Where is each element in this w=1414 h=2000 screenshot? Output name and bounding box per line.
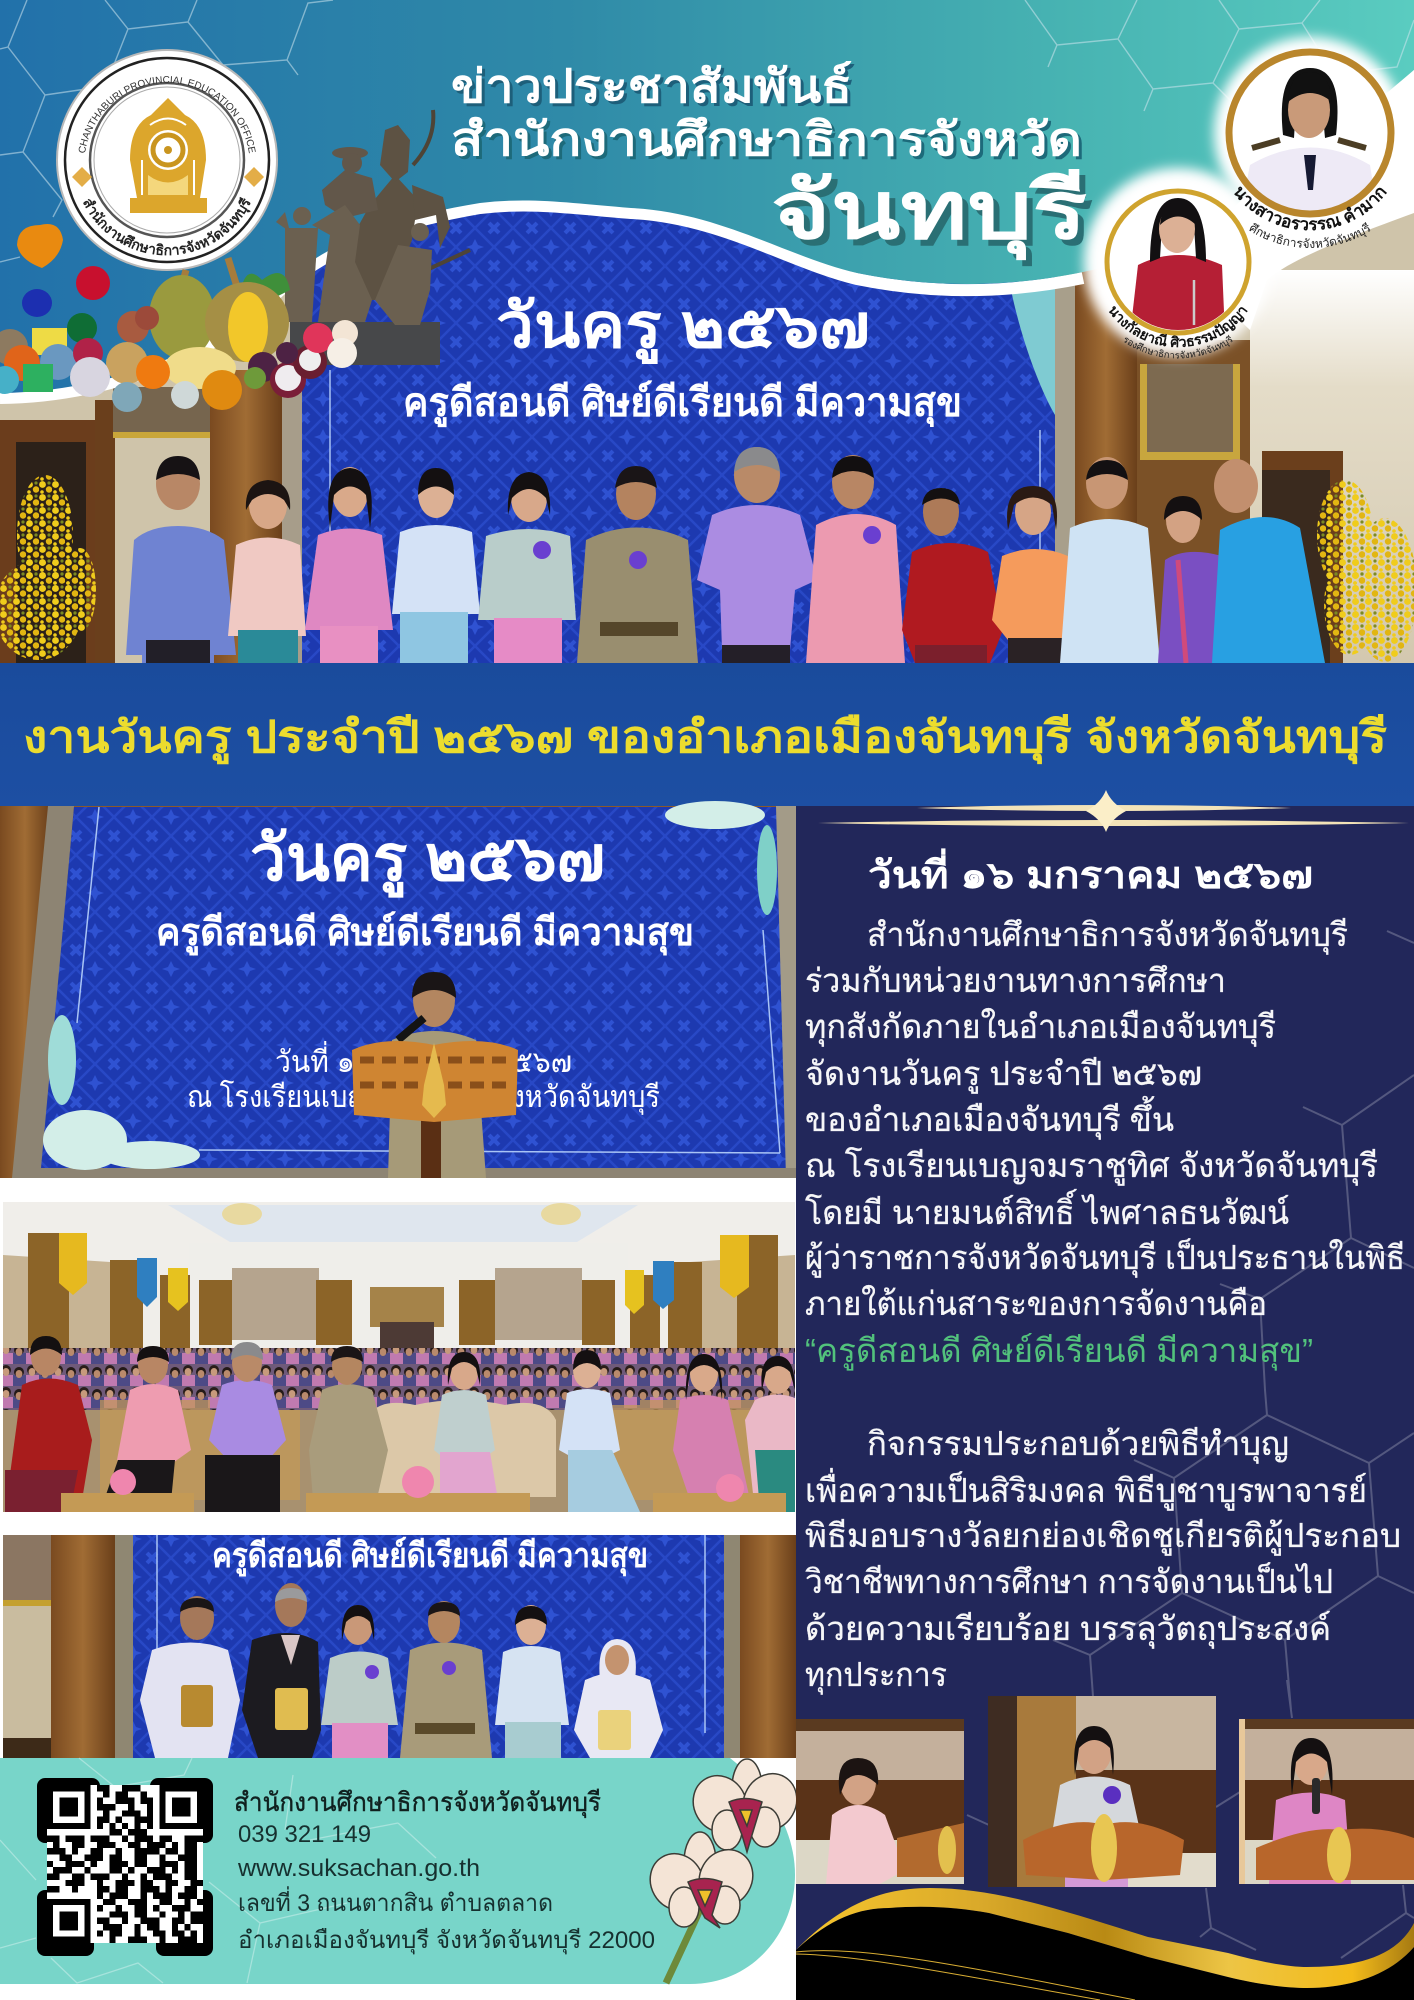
person 1	[126, 456, 236, 663]
paragraph 1: โดยมี นายมนต์สิทธิ์ ไพศาลธนวัฒน์	[805, 1189, 1289, 1231]
hero group photo	[0, 200, 1414, 663]
flowers right	[1317, 480, 1414, 662]
title 2: รองศึกษาธิการจังหวัดจันทบุรี	[1124, 334, 1232, 359]
header title line 1: ข่าวประชาสัมพันธ์	[451, 60, 852, 112]
person 8	[806, 455, 905, 663]
hero photo left door	[0, 420, 95, 663]
green theme quote: “ครูดีสอนดี ศิษย์ดีเรียนดี มีความสุข”	[805, 1332, 1313, 1371]
rider	[322, 147, 378, 218]
logo badge	[56, 49, 278, 271]
hexagon lines	[967, 931, 1414, 1958]
durians	[149, 258, 290, 389]
screen subtitle: ครูดีสอนดี ศิษย์ดีเรียนดี มีความสุข	[403, 380, 962, 428]
name 2: นางกัลยาณี ศิวธรรมปัญญา	[1109, 306, 1248, 348]
small photo: speaker center	[988, 1696, 1216, 1887]
screen subtitle: ครูดีสอนดี ศิษย์ดีเรียนดี มีความสุข	[156, 911, 694, 956]
photo: award recipients	[3, 1535, 796, 1758]
paragraph 2: พิธีมอบรางวัลยกย่องเชิดชูเกียรติผู้ประกอบ	[805, 1517, 1401, 1556]
person 11	[1060, 457, 1160, 663]
small photo: speaker right	[1239, 1719, 1414, 1884]
paragraph 2: กิจกรรมประกอบด้วยพิธีทำบุญ	[867, 1425, 1289, 1464]
contact office name: สำนักงานศึกษาธิการจังหวัดจันทบุรี	[234, 1787, 601, 1818]
recipients	[140, 1583, 663, 1758]
header title line 2: สำนักงานศึกษาธิการจังหวัด	[451, 113, 1082, 165]
flowers left	[0, 475, 96, 660]
screen venue: ณ โรงเรียนเบญจมราชูทิศ จังหวัดจันทบุรี	[187, 1079, 660, 1116]
orchid flower top	[683, 1759, 807, 1852]
contact address line 1: เลขที่ 3 ถนนตากสิน ตำบลตลาด	[238, 1886, 553, 1917]
person 9	[902, 488, 1003, 663]
screen date: วันที่ ๑๖ มกราคม ๒๕๖๗	[275, 1041, 572, 1079]
paragraph 1: จัดงานวันครู ประจำปี ๒๕๖๗	[805, 1055, 1202, 1094]
paragraph 2: ด้วยความเรียบร้อย บรรลุวัตถุประสงค์	[805, 1610, 1331, 1649]
paragraph 2	[805, 1425, 1401, 1695]
contact panel	[0, 1758, 807, 1984]
hero photo right door	[1262, 451, 1343, 663]
paragraph 1: ทุกสังกัดภายในอำเภอเมืองจันทบุรี	[805, 1008, 1276, 1047]
paragraph 1: ภายใต้แก่นสาระของการจัดงานคือ	[805, 1285, 1267, 1322]
hall wood columns	[28, 1233, 778, 1352]
statue	[276, 110, 470, 365]
hero photo blue screen	[302, 200, 1055, 663]
paragraph 1: สำนักงานศึกษาธิการจังหวัดจันทบุรี	[867, 916, 1348, 955]
paragraph 2: ทุกประการ	[805, 1656, 947, 1695]
portrait: deputy director	[1104, 188, 1252, 359]
header title line 3: จันทบุรี	[771, 166, 1087, 261]
hall flags	[59, 1233, 749, 1314]
gems	[0, 224, 242, 412]
photo: audience in hall	[3, 1202, 795, 1512]
orchid illustration	[640, 1759, 807, 1983]
contact website: www.suksachan.go.th	[237, 1855, 480, 1882]
hero photo right painting	[1137, 340, 1259, 663]
name 1: นางสาวอรวรรณ คำมาก	[1234, 186, 1387, 230]
paragraph 2: วิชาชีพทางการศึกษา การจัดงานเป็นไป	[805, 1562, 1333, 1600]
person 13	[1212, 459, 1325, 663]
person 2	[228, 480, 306, 663]
gold wave footer	[796, 1888, 1414, 2000]
contact address line 2: อำเภอเมืองจันทบุรี จังหวัดจันทบุรี 22000	[238, 1927, 655, 1955]
title 1: ศึกษาธิการจังหวัดจันทบุรี	[1249, 222, 1370, 248]
orchid flower bottom	[640, 1832, 763, 1928]
person 4	[392, 468, 480, 663]
teal header wave	[0, 0, 1414, 398]
person 10	[992, 486, 1080, 663]
white area behind portraits	[1084, 37, 1414, 356]
hexagon lines	[0, 0, 1414, 262]
horse	[340, 125, 450, 300]
logo Thai arc text: สำนักงานศึกษาธิการจังหวัดจันทบุรี	[83, 196, 251, 256]
people row	[126, 447, 1325, 663]
QR code	[37, 1778, 213, 1956]
date heading: วันที่ ๑๖ มกราคม ๒๕๖๗	[868, 848, 1313, 897]
headline text: งานวันครู ประจำปี ๒๕๖๗ ของอำเภอเมืองจันทบุรี จังหวัดจันทบุรี	[23, 713, 1387, 765]
paragraph 1: ของอำเภอเมืองจันทบุรี ขึ้น	[805, 1096, 1174, 1140]
person 7	[697, 447, 817, 663]
person 6	[577, 466, 698, 663]
yellow headline band	[0, 663, 1414, 806]
contact phone: 039 321 149	[238, 1821, 371, 1848]
paragraph 1: ณ โรงเรียนเบญจมราชูทิศ จังหวัดจันทบุรี	[805, 1147, 1378, 1186]
screen subtitle: ครูดีสอนดี ศิษย์ดีเรียนดี มีความสุข	[212, 1536, 648, 1577]
person 5	[478, 472, 576, 663]
tables	[61, 1493, 786, 1512]
tropical fruits	[106, 306, 358, 398]
logo English arc text: CHANTHABURI PROVINCIAL EDUCATION OFFICE	[78, 76, 256, 154]
right news panel	[796, 790, 1414, 2000]
screen flowers	[43, 801, 777, 1170]
screen title: วันครู ๒๕๖๗	[250, 822, 605, 898]
paragraph 2: เพื่อความเป็นสิริมงคล พิธีบูชาบูรพาจารย์	[805, 1468, 1367, 1511]
hall panels	[232, 1268, 582, 1340]
contact hex lines	[0, 1758, 436, 1983]
paragraph 1	[805, 916, 1405, 1322]
sofa	[367, 1400, 556, 1497]
crowd	[3, 1348, 795, 1418]
speaker	[388, 972, 486, 1178]
portrait: provincial education officer	[1226, 48, 1394, 248]
small photo: speaker left	[796, 1719, 964, 1884]
paragraph 1: ร่วมกับหน่วยงานทางการศึกษา	[805, 962, 1226, 999]
table flowers	[110, 1466, 744, 1502]
person 3	[305, 467, 393, 663]
foot soldiers	[276, 205, 432, 325]
lectern	[352, 1041, 518, 1178]
photo: speaker at lectern	[0, 801, 796, 1178]
front row guests	[5, 1336, 795, 1512]
fruits and gems	[0, 224, 358, 412]
chairs and seats	[3, 1400, 795, 1512]
person 12	[1158, 496, 1245, 663]
screen title: วันครู ๒๕๖๗	[496, 292, 870, 364]
emblem	[130, 98, 207, 213]
gold divider ornament	[818, 790, 1409, 832]
